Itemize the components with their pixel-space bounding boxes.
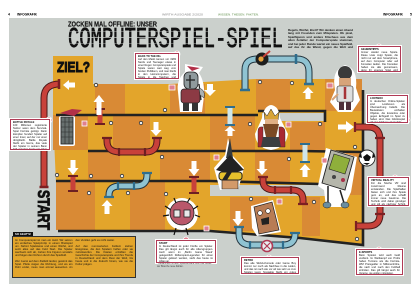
direction arrows xyxy=(63,80,354,226)
info box: outlook: GEHEIMTIPPS xyxy=(361,48,379,51)
board rivets xyxy=(55,80,359,241)
info box: mid xyxy=(241,257,299,274)
info box: outlook xyxy=(358,46,401,72)
number badges xyxy=(46,44,410,261)
pipe: blue mid xyxy=(104,173,152,197)
bottom-left rules panel: Auf den nummerierten Feldern stehen Ereignisse, die den Spielern helfen oder sie zurückwerfen. Die Kästen erzählen die Geschichte der Computerspiele und ihre Trends in Deutschland und dem Rest der Welt, bis heute und in die Zukunft hinein, wie sie die Kultur prägen. xyxy=(76,245,133,266)
subheading: ZOCKEN MAL OFFLINE: UNSER xyxy=(68,20,158,28)
footnote: * Zusammen mit dem Spieleverband nennt die Studie der Branche neue Zahlen. xyxy=(157,263,211,268)
tag: game rules: SO GEHT'S! xyxy=(15,232,31,236)
heading: goal: ZIEL? xyxy=(57,59,90,76)
page header: INFOGRAFIK xyxy=(17,12,38,16)
page header: INFOGRAFIK xyxy=(383,12,404,16)
character: brain xyxy=(163,198,200,235)
bottom-left rules panel: Wer zuerst auf dem Zielfeld landet, gewinnt das Spiel. Pfeile zeigen die Richtung, und wo ein Rohr endet, muss man einmal aussetzen. An den Ventilen geht es nicht weiter. xyxy=(15,238,115,269)
page header: 4 xyxy=(8,12,10,16)
page header: WISSEN. THESEN. FAKTEN. xyxy=(218,12,259,16)
page header: WIRTH AUSGABE 2/2020 xyxy=(162,12,203,16)
info box: mid: RETRO xyxy=(244,259,253,262)
info box: e-sports: Beim Spielen wird auch Geld verdient. Im Wettkampf von Profis haben Turniere wie die Fortnite-WM Preisgelder in Millionenhöhe, die nach und nach den Fußball einholen. Das gilt längst auch für Vereine, sie wollen mitspielen. xyxy=(359,254,400,275)
info box: virtual reality: VIRTUAL REALITY xyxy=(371,179,394,182)
character: tower xyxy=(59,109,82,146)
pipe: red S xyxy=(258,177,308,204)
bottom-left rules panel xyxy=(12,236,136,278)
character: paper bag xyxy=(251,200,281,236)
tag: game rules xyxy=(13,232,33,237)
info box: back to the 80s xyxy=(135,53,179,79)
pipe: red left long xyxy=(40,79,60,187)
character: king xyxy=(255,105,288,150)
page header xyxy=(8,12,412,16)
info box: e-sports: E-SPORTS xyxy=(359,251,372,254)
heading: start: START xyxy=(34,190,53,230)
bottom-left rules panel: Im Computerspiel ist man ein Held. Wir setzen ein einfaches Spielprinzip in einem Brettspiel um. Nehmt Spielsteine und einen Würfel, und setzt alles auf das Feld Start. Die Spieler wechseln sich ab, ziehen ihre Figuren vorwärts und folgen den Rohren durch das Spielfeld. xyxy=(15,238,72,257)
character: mobster xyxy=(330,65,360,112)
pipes: red short vertical xyxy=(68,109,199,193)
pipe: red right xyxy=(355,122,385,231)
pipe: blue bottom U with valve xyxy=(234,227,300,252)
pipe: red U xyxy=(102,138,162,156)
info box: centre: In Deutschland ist jeder Fünfte ein Spieler. Das gilt längst auch für alle Altersgruppen. Auch wenn im „Berlin Game Week“ gelegentlich Rollenspiel-Legenden für einen Spieler gefeiert werden, steht das heute im Alltag an. xyxy=(159,245,213,263)
title: COMPUTERSPIEL-SPIEL xyxy=(68,23,283,56)
character: pagoda goggles xyxy=(214,138,244,190)
info box: back to the 80s: BACK TO THE 80s xyxy=(138,55,161,58)
pipes: blue short vertical xyxy=(225,107,310,162)
game board xyxy=(53,56,363,245)
gray channels xyxy=(210,113,328,196)
page header: 5 xyxy=(410,12,412,16)
black track lines xyxy=(56,90,363,245)
info box: portable: LOOTBOX xyxy=(370,97,383,100)
character: handheld console xyxy=(318,148,357,208)
character: knight xyxy=(178,64,204,112)
info box: battle royale: BATTLE ROYALE xyxy=(13,121,34,124)
info box: portable xyxy=(367,95,408,123)
pipe: blue top with valve xyxy=(240,51,314,90)
icon: football xyxy=(359,150,375,166)
info box: centre: START xyxy=(159,242,167,245)
